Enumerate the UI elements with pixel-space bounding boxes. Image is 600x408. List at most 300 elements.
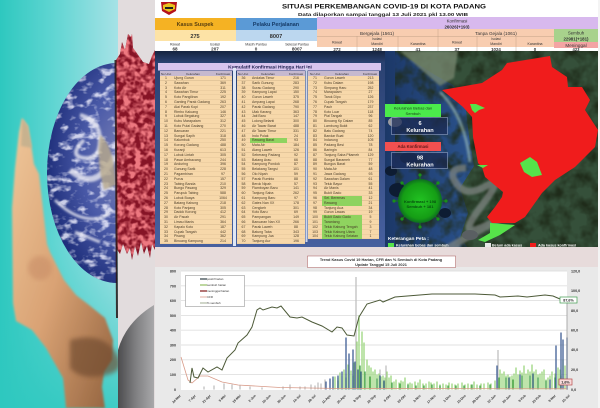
left axis labels: 500: [170, 314, 176, 318]
panel: konfirmasi: Karantina: [411, 42, 426, 46]
table 2: kelurahan 36 to 70: 36: [242, 76, 245, 80]
icon: virus half: [116, 34, 155, 260]
table 3: kelurahan 71 to 104: 118: [368, 110, 373, 114]
table 3: kelurahan 71 to 104: 78: [313, 110, 317, 114]
table 3: kelurahan 71 to 104: 85: [313, 143, 317, 147]
x axis date labels: 20-Okt: [397, 393, 407, 404]
table 1: kelurahan 1 to 35: 16: [164, 148, 168, 152]
spike line: [566, 298, 568, 390]
table 3: kelurahan 71 to 104: 213: [368, 76, 373, 80]
table 1: kelurahan 1 to 35: Koto Pulai Gadang: [174, 124, 203, 128]
table 3: kelurahan 71 to 104: Rawang: [324, 201, 337, 205]
callout: kelurahan bebas: [385, 104, 448, 134]
map panel: [385, 51, 598, 251]
panel: meninggal: [554, 42, 598, 52]
table 1: kelurahan 1 to 35: 12: [164, 129, 168, 133]
callout: ada konfirmasi: 98: [417, 156, 423, 162]
table 2: kelurahan 36 to 70: 128: [293, 234, 299, 238]
table 1: kelurahan 1 to 35: [160, 76, 232, 244]
table 2: kelurahan 36 to 70: Tanjung Aur: [252, 239, 270, 243]
icon: green virus with totals: Sembuh + 181: [406, 204, 434, 209]
panel: konfirmasi: 26026(+193): [444, 24, 470, 29]
table 2: kelurahan 36 to 70: 53: [242, 158, 245, 162]
icon: grey shape at bottom: [118, 305, 154, 408]
callout: 1,6%: 1,6%: [561, 381, 570, 385]
green areas: kelurahan bebas: [470, 104, 542, 242]
table 1: kelurahan 1 to 35: 305: [220, 206, 226, 210]
table 3: kelurahan 71 to 104: 105: [368, 138, 373, 142]
panel: sembuh: [554, 29, 598, 42]
table 1: kelurahan 1 to 35: 187: [220, 225, 226, 229]
panel: konfirmasi: 1024: [491, 47, 501, 52]
table 1: kelurahan 1 to 35: Anduring: [174, 162, 188, 166]
line: percent recovered: [190, 294, 560, 383]
table 3: kelurahan 71 to 104: 120: [368, 134, 373, 138]
table 2: kelurahan 36 to 70: 55: [242, 167, 245, 171]
table 2: kelurahan 36 to 70: 290: [293, 86, 299, 90]
callout: kelurahan bebas: Kelurahan Bebas dan: [394, 106, 432, 110]
x axis date labels: 1-Des: [443, 394, 452, 403]
panel: pelaku perjalanan: Selesai Pantau: [285, 42, 309, 46]
x axis date labels: 12-Jan: [486, 394, 497, 404]
table 3: kelurahan 71 to 104: Bukit Gado: [324, 191, 341, 195]
table 3: kelurahan 71 to 104: 91: [313, 172, 317, 176]
table 1: kelurahan 1 to 35: Korong Gadang: [174, 143, 199, 147]
table 3: kelurahan 71 to 104: Air Manis: [324, 186, 339, 190]
table 3: kelurahan 71 to 104: 100: [312, 215, 318, 219]
table 3: kelurahan 71 to 104: 27: [369, 90, 372, 94]
table 1: kelurahan 1 to 35: Lubuk Begalung: [174, 114, 199, 118]
left axis labels: 800: [170, 270, 176, 274]
table 3: kelurahan 71 to 104: 81: [313, 124, 317, 128]
table 1: kelurahan 1 to 35: 305: [220, 153, 226, 157]
table 3: kelurahan 71 to 104: 76: [313, 100, 317, 104]
table 1: kelurahan 1 to 35: 28: [164, 206, 168, 210]
table 1: kelurahan 1 to 35: Banuaran: [174, 129, 189, 133]
table 1: kelurahan 1 to 35: 221: [220, 129, 226, 133]
table 2: kelurahan 36 to 70: 41: [242, 100, 245, 104]
panel: pelaku perjalanan: Pelaku Perjalanan: [253, 22, 299, 28]
legend: keterangan peta: [388, 237, 576, 247]
table 1: kelurahan 1 to 35: 5: [165, 95, 167, 99]
table 2: kelurahan 36 to 70: Kampung Lapai: [252, 90, 277, 94]
table 1: kelurahan 1 to 35: 6: [165, 100, 167, 104]
table 2: kelurahan 36 to 70: Andalas Timur: [252, 76, 274, 80]
table 3: kelurahan 71 to 104: 99: [313, 210, 317, 214]
chart legend: [186, 276, 244, 306]
right axis labels: 0,0: [571, 388, 576, 392]
table 2: kelurahan 36 to 70: 97: [294, 196, 298, 200]
table 3: kelurahan 71 to 104: 75: [313, 95, 317, 99]
table 2: kelurahan 36 to 70: Surau Gadang: [252, 86, 275, 90]
table 3: kelurahan 71 to 104: Padang Besi: [324, 143, 344, 147]
panel: konfirmasi: 41: [416, 47, 421, 52]
panel: konfirmasi: 1248: [372, 47, 382, 52]
table 2: kelurahan 36 to 70: 147: [293, 114, 299, 118]
table 2: kelurahan 36 to 70: 47: [242, 129, 245, 133]
x axis date labels: 15-Jul: [561, 394, 571, 403]
table 1: kelurahan 1 to 35: 329: [220, 186, 226, 190]
x axis date labels: 19-Mei: [232, 394, 242, 404]
table 3: kelurahan 71 to 104: 62: [369, 124, 372, 128]
table 3: kelurahan 71 to 104: 104: [312, 234, 318, 238]
panel: pelaku perjalanan: 8007: [292, 47, 303, 52]
table 1: kelurahan 1 to 35: 15: [164, 143, 168, 147]
table 1: kelurahan 1 to 35: 19: [164, 162, 168, 166]
table 3: kelurahan 71 to 104: Tanjung Aua: [324, 206, 343, 210]
table 2: kelurahan 36 to 70: 69: [242, 234, 245, 238]
table 3: kelurahan 71 to 104: Bukit Gado Gado: [324, 215, 351, 219]
left axis labels: 400: [170, 329, 176, 333]
table 3: kelurahan 71 to 104: Sawahan Dalam: [324, 177, 350, 181]
table 2: kelurahan 36 to 70: 216: [293, 76, 299, 80]
table 1: kelurahan 1 to 35: Lubuk Buaya: [174, 196, 194, 200]
table 1: kelurahan 1 to 35: 25: [164, 191, 168, 195]
table 1: kelurahan 1 to 35: Sawahan Timur: [174, 90, 198, 94]
table 1: kelurahan 1 to 35: Koto Pangiliran: [174, 95, 198, 99]
chart legend: meninggal harian: [207, 289, 230, 293]
table 3: kelurahan 71 to 104: 72: [313, 81, 317, 85]
table 1: kelurahan 1 to 35: 263: [220, 100, 226, 104]
table 1: kelurahan 1 to 35: 27: [164, 201, 168, 205]
table 2: kelurahan 36 to 70: Koto Baru: [252, 210, 268, 214]
panel: konfirmasi: 37: [455, 47, 460, 52]
chart panel: [155, 0, 600, 408]
table 3: kelurahan 71 to 104: 19: [369, 210, 372, 214]
panel: konfirmasi: [317, 17, 598, 52]
legend: keterangan peta: Ada kasus konfirmasi: [538, 244, 576, 248]
table 2: kelurahan 36 to 70: Banuaran Nan XX: [252, 220, 280, 224]
table 1: kelurahan 1 to 35: 210: [220, 182, 226, 186]
table 3: kelurahan 71 to 104: Teluk Kabung Selatan: [324, 234, 358, 238]
table 3: kelurahan 71 to 104: [308, 76, 379, 239]
x axis date labels: 6-Okt: [383, 393, 392, 403]
table 3: kelurahan 71 to 104: 12: [369, 196, 372, 200]
table 3: kelurahan 71 to 104: 86: [313, 148, 317, 152]
table 1: kelurahan 1 to 35: 34: [164, 234, 168, 238]
right axis labels: 20,0: [571, 368, 578, 372]
table 1: kelurahan 1 to 35: 4: [165, 90, 167, 94]
table 1: kelurahan 1 to 35: 364: [220, 220, 226, 224]
table 1: kelurahan 1 to 35: 488: [220, 143, 226, 147]
table 3: kelurahan 71 to 104: 93: [369, 172, 372, 176]
table 3: kelurahan 71 to 104: 126: [368, 95, 373, 99]
table 2: kelurahan 36 to 70: Sarik Gunung: [252, 81, 273, 85]
table 3: kelurahan 71 to 104: 21: [369, 201, 372, 205]
table 3: kelurahan 71 to 104: Marapalam: [324, 90, 342, 94]
column headers: Konfirmasi: [363, 72, 377, 76]
line: cfr: [181, 357, 567, 389]
table 1: kelurahan 1 to 35: 20: [164, 167, 168, 171]
panel: konfirmasi: Rawat: [332, 40, 342, 44]
table 1: kelurahan 1 to 35: 613: [220, 148, 226, 152]
panel: konfirmasi: Bergejala (1561): [360, 31, 394, 36]
table 2: kelurahan 36 to 70: Parak Gadang: [252, 105, 275, 109]
table 2: kelurahan 36 to 70: 150: [293, 90, 299, 94]
icon: earth half globe: [47, 63, 117, 283]
table 3: kelurahan 71 to 104: Mata Air: [324, 167, 337, 171]
table 2: kelurahan 36 to 70: 301: [293, 206, 299, 210]
stats table: [155, 17, 598, 52]
table 3: kelurahan 71 to 104: 83: [313, 134, 317, 138]
table 2: kelurahan 36 to 70: Tanjung Saba: [252, 191, 273, 195]
left axis labels: 0: [174, 388, 176, 392]
table 1: kelurahan 1 to 35: 228: [220, 167, 226, 171]
table 1: kelurahan 1 to 35: Koto Air: [174, 86, 186, 90]
table 2: kelurahan 36 to 70: 56: [242, 172, 245, 176]
table 1: kelurahan 1 to 35: 22: [164, 177, 168, 181]
heading: kumulatif: Kumulatif Konfirmasi Hingga Hari Ini: [228, 65, 312, 71]
table 3: kelurahan 71 to 104: 33: [369, 191, 372, 195]
table 1: kelurahan 1 to 35: 23: [164, 182, 168, 186]
table 3: kelurahan 71 to 104: 79: [313, 114, 317, 118]
callout: ada konfirmasi: [385, 142, 448, 168]
coastal plume: [443, 168, 503, 251]
legend: keterangan peta: Keterangan Peta :: [388, 236, 429, 242]
x axis date labels: 11-Agu: [321, 394, 332, 404]
table 2: kelurahan 36 to 70: Cengkeh: [252, 206, 266, 210]
table 2: kelurahan 36 to 70: 343: [293, 230, 299, 234]
x axis date labels: 28-Jul: [307, 394, 317, 403]
table 1: kelurahan 1 to 35: Tabing Banda: [174, 182, 195, 186]
panel: kasus suspek: 207: [211, 47, 219, 52]
table 1: kelurahan 1 to 35: Parupuk Tabing: [174, 191, 198, 195]
table 1: kelurahan 1 to 35: Dadok Korong: [174, 210, 196, 214]
table 1: kelurahan 1 to 35: 171: [220, 76, 226, 80]
table 1: kelurahan 1 to 35: Bungo Pasang: [174, 186, 197, 190]
table 3: kelurahan 71 to 104: 3: [370, 225, 371, 229]
table 2: kelurahan 36 to 70: 69: [294, 210, 298, 214]
legend: keterangan peta: Belum ada kasus: [492, 244, 522, 248]
table 2: kelurahan 36 to 70: 40: [242, 95, 245, 99]
table 1: kelurahan 1 to 35: Purus: [174, 177, 183, 181]
table 1: kelurahan 1 to 35: Gunung Sarik: [174, 167, 195, 171]
table 3: kelurahan 71 to 104: Bandar Buat: [324, 134, 343, 138]
table 3: kelurahan 71 to 104: 59: [369, 162, 372, 166]
table 3: kelurahan 71 to 104: Simpang Haru: [324, 86, 346, 90]
panel: konfirmasi: Rawat: [452, 40, 462, 44]
column headers: Kelurahan: [261, 72, 275, 76]
x axis date labels: 2-Jun: [248, 394, 257, 403]
table 3: kelurahan 71 to 104: Tarok Dipo: [324, 95, 341, 99]
table 1: kelurahan 1 to 35: 225: [220, 90, 226, 94]
right axis labels: [571, 270, 580, 392]
table 1: kelurahan 1 to 35: 362: [220, 234, 226, 238]
x axis date labels: 29-Des: [471, 394, 482, 404]
table 1: kelurahan 1 to 35: Ujung Gurun: [174, 76, 194, 80]
panel: konfirmasi: 272: [333, 47, 341, 52]
table 3: kelurahan 71 to 104: 1: [370, 234, 371, 238]
table 2: kelurahan 36 to 70: 60: [242, 191, 245, 195]
table 3: kelurahan 71 to 104: 71: [313, 76, 317, 80]
panel: pelaku perjalanan: Masih Pantau: [245, 42, 267, 46]
icon: city logo: [161, 2, 177, 15]
right axis labels: 60,0: [571, 328, 578, 332]
table 3: kelurahan 71 to 104: 98: [313, 206, 317, 210]
table 1: kelurahan 1 to 35: 311: [220, 86, 226, 90]
table 1: kelurahan 1 to 35: Pisang: [174, 234, 185, 238]
table 2: kelurahan 36 to 70: 51: [242, 148, 245, 152]
column headers: Konfirmasi: [216, 72, 230, 76]
table 3: kelurahan 71 to 104: 78: [369, 143, 372, 147]
table 2: kelurahan 36 to 70: Gates Nan XX: [252, 201, 274, 205]
table 2: kelurahan 36 to 70: 92: [294, 153, 298, 157]
table 1: kelurahan 1 to 35: 214: [220, 239, 226, 243]
panel: konfirmasi: Tanpa Gejala (1061): [475, 31, 517, 36]
x axis date labels: 7-Apr: [188, 393, 197, 403]
table 1: kelurahan 1 to 35: Pasar Ambacang: [174, 158, 201, 162]
table 3: kelurahan 71 to 104: 96: [313, 196, 317, 200]
table 2: kelurahan 36 to 70: 42: [242, 105, 245, 109]
table 3: kelurahan 71 to 104: 93: [313, 182, 317, 186]
right axis labels: 80,0: [571, 309, 578, 313]
table 2: kelurahan 36 to 70: 43: [242, 110, 245, 114]
table 1: kelurahan 1 to 35: Kuranji: [174, 148, 185, 152]
header band: [155, 0, 600, 18]
left axis labels: [170, 270, 176, 392]
table 2: kelurahan 36 to 70: 64: [242, 210, 245, 214]
table 3: kelurahan 71 to 104: 252: [368, 86, 373, 90]
table 3: kelurahan 71 to 104: 77: [369, 158, 372, 162]
table 3: kelurahan 71 to 104: Pauh: [324, 105, 332, 109]
table 3: kelurahan 71 to 104: 89: [313, 162, 317, 166]
table 1: kelurahan 1 to 35: 396: [220, 162, 226, 166]
table 2: kelurahan 36 to 70: 48: [242, 134, 245, 138]
table 2: kelurahan 36 to 70: Parak Laweh: [252, 225, 272, 229]
table 3: kelurahan 71 to 104: 103: [312, 230, 318, 234]
table 1: kelurahan 1 to 35: Limau Manis: [174, 220, 194, 224]
chart legend: % sembuh: [207, 301, 221, 305]
table 2: kelurahan 36 to 70: 790: [293, 105, 299, 109]
table 2: kelurahan 36 to 70: 45: [242, 119, 245, 123]
table 1: kelurahan 1 to 35: 11: [164, 124, 168, 128]
heading: kumulatif: [158, 63, 381, 71]
table 1: kelurahan 1 to 35: 35: [164, 239, 168, 243]
table 3: kelurahan 71 to 104: Teluk Kabung Tengah: [324, 225, 358, 229]
table 1: kelurahan 1 to 35: 218: [220, 201, 226, 205]
chart title: Update Tanggal 15 Juli 2021: [355, 262, 408, 267]
table 2: kelurahan 36 to 70: Indo Polak: [252, 134, 269, 138]
table 1: kelurahan 1 to 35: 33: [164, 230, 168, 234]
table 3: kelurahan 71 to 104: 80: [313, 119, 317, 123]
table 2: kelurahan 36 to 70: 283: [293, 81, 299, 85]
islands: [385, 117, 478, 240]
table 2: kelurahan 36 to 70: Kampung Baru: [252, 196, 275, 200]
table 3: kelurahan 71 to 104: 5: [370, 215, 371, 219]
table 1: kelurahan 1 to 35: Sawahan: [174, 81, 189, 85]
table 3: kelurahan 71 to 104: 198: [368, 81, 373, 85]
x axis date labels: 5-Mei: [218, 394, 227, 403]
x axis date labels: 15-Des: [456, 394, 467, 404]
table 2: kelurahan 36 to 70: Alang Laweh: [252, 148, 272, 152]
table 1: kelurahan 1 to 35: Air Pacah: [174, 215, 189, 219]
panel: kasus suspek: 275: [190, 34, 200, 40]
table 2: kelurahan 36 to 70: 87: [294, 162, 298, 166]
left axis labels: 100: [170, 373, 176, 377]
table 2: kelurahan 36 to 70: 331: [293, 129, 299, 133]
chart legend: sembuh harian: [207, 283, 227, 287]
table 2: kelurahan 36 to 70: 38: [242, 86, 245, 90]
table 1: kelurahan 1 to 35: 412: [220, 210, 226, 214]
table 1: kelurahan 1 to 35: 442: [220, 230, 226, 234]
x axis date labels: 14-Jul: [292, 394, 302, 403]
column headers: Kelurahan: [186, 72, 200, 76]
callout: kelurahan bebas: Kelurahan: [406, 128, 434, 134]
table 2: kelurahan 36 to 70: Olo Nipah: [252, 172, 268, 176]
right axis labels: 120,0: [571, 270, 580, 274]
table 3: kelurahan 71 to 104: 87: [313, 153, 317, 157]
table 3: kelurahan 71 to 104: Teluk Bayur: [324, 182, 342, 186]
chart title: [308, 256, 456, 268]
panel: pelaku perjalanan: 8007: [270, 34, 282, 40]
table 2: kelurahan 36 to 70: 363: [293, 110, 299, 114]
table 3: kelurahan 71 to 104: 61: [369, 177, 372, 181]
table 2: kelurahan 36 to 70: 65: [242, 215, 245, 219]
table 1: kelurahan 1 to 35: 1064: [219, 196, 227, 200]
column headers: No Urut: [161, 72, 171, 76]
table 1: kelurahan 1 to 35: 14: [164, 138, 168, 142]
x axis date labels: 24-Mar: [171, 393, 182, 404]
table 1: kelurahan 1 to 35: 18: [164, 158, 168, 162]
table 2: kelurahan 36 to 70: [237, 76, 305, 244]
table 3: kelurahan 71 to 104: 84: [369, 148, 372, 152]
table 1: kelurahan 1 to 35: 2: [165, 81, 167, 85]
table 3: kelurahan 71 to 104: Tanjung Saba Pitameh: [324, 153, 359, 157]
panel: konfirmasi: Konfirmasi: [447, 18, 467, 23]
table 3: kelurahan 71 to 104: Jawa Gadang: [324, 172, 346, 176]
table 1: kelurahan 1 to 35: 26: [164, 196, 168, 200]
table 1: kelurahan 1 to 35: 8: [165, 110, 167, 114]
table 2: kelurahan 36 to 70: 488: [293, 124, 299, 128]
table 3: kelurahan 71 to 104: 74: [369, 129, 372, 133]
table 1: kelurahan 1 to 35: 312: [220, 119, 226, 123]
table 1: kelurahan 1 to 35: 207: [220, 105, 226, 109]
column headers: Konfirmasi: [289, 72, 303, 76]
column headers: No Urut: [310, 72, 320, 76]
table 2: kelurahan 36 to 70: 57: [242, 177, 245, 181]
table 2: kelurahan 36 to 70: 52: [242, 153, 245, 157]
table 2: kelurahan 36 to 70: 66: [242, 220, 245, 224]
table 2: kelurahan 36 to 70: 57: [294, 182, 298, 186]
table 1: kelurahan 1 to 35: 291: [220, 215, 226, 219]
bars: daily recovered and confirmed: [204, 277, 567, 390]
table 2: kelurahan 36 to 70: Seberang Padang: [252, 153, 280, 157]
table 1: kelurahan 1 to 35: 270: [220, 124, 226, 128]
x axis date labels: 30-Jun: [276, 394, 287, 404]
panel: konfirmasi: Mandiri: [371, 42, 383, 46]
left axis labels: 200: [170, 358, 176, 362]
subtitle: Data dilaporkan sampai tanggal 13 Juli 2021 pkl 13.00 WIB: [298, 12, 469, 18]
table 2: kelurahan 36 to 70: 46: [242, 124, 245, 128]
table 2: kelurahan 36 to 70: 266: [293, 220, 299, 224]
panel: konfirmasi: Mandiri: [490, 42, 502, 46]
table 2: kelurahan 36 to 70: Berok Nipah: [252, 182, 271, 186]
table 2: kelurahan 36 to 70: 196: [293, 239, 299, 243]
table 2: kelurahan 36 to 70: Lolong Belanti: [252, 119, 274, 123]
table 3: kelurahan 71 to 104: Batu Gadang: [324, 129, 345, 133]
panel: konfirmasi: Karantina: [528, 42, 543, 46]
table 1: kelurahan 1 to 35: Sungai Sapih: [174, 134, 195, 138]
table 1: kelurahan 1 to 35: 588: [220, 191, 226, 195]
table 3: kelurahan 71 to 104: 102: [312, 225, 318, 229]
table 1: kelurahan 1 to 35: 24: [164, 186, 168, 190]
table 2: kelurahan 36 to 70: 58: [242, 182, 245, 186]
table 2: kelurahan 36 to 70: Batung Taba: [252, 230, 272, 234]
table 2: kelurahan 36 to 70: 63: [242, 206, 245, 210]
callout: ada konfirmasi: Kelurahan: [406, 162, 434, 168]
table 3: kelurahan 71 to 104: 97: [313, 201, 317, 205]
table 1: kelurahan 1 to 35: 9: [165, 114, 167, 118]
